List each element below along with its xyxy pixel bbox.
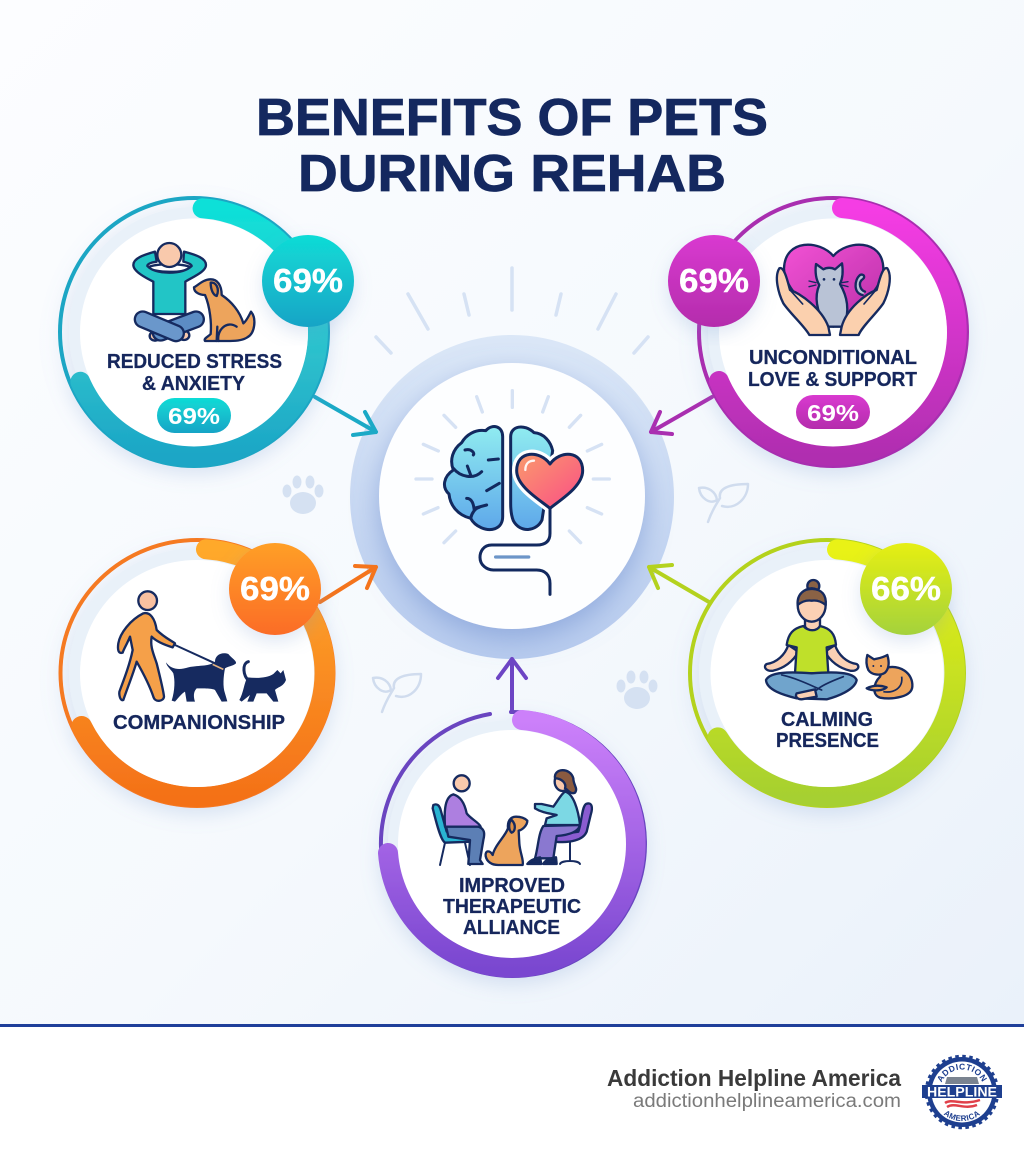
label: LOVE & SUPPORT — [748, 369, 917, 391]
icon: woman meditating with cat — [765, 580, 912, 699]
icon: person walking dog and cat — [118, 591, 286, 702]
title: BENEFITS OF PETS — [256, 89, 768, 147]
title — [256, 89, 768, 203]
label: CALMING — [781, 709, 873, 731]
arrow: stress to hub — [315, 397, 376, 435]
badge: 69% companionship: 69% — [240, 570, 310, 607]
footer brand name: Addiction Helpline America — [607, 1065, 901, 1091]
icon: leaf right — [699, 484, 748, 522]
badge: 69% stress — [262, 235, 354, 327]
logo seal: HELPLINE — [927, 1084, 997, 1100]
label: COMPANIONSHIP — [113, 712, 285, 734]
icon: brain and heart — [416, 391, 609, 594]
badge: 69% companionship — [229, 543, 321, 635]
label: & ANXIETY — [142, 373, 246, 395]
badge: 69% love: 69% — [679, 262, 749, 299]
label: IMPROVED — [459, 875, 565, 897]
badge: 66% calming: 66% — [871, 570, 941, 607]
footer url: addictionhelplineamerica.com — [633, 1091, 901, 1112]
panel: companionship — [60, 540, 334, 806]
arrow: love to hub — [651, 397, 712, 434]
panel: unconditional love and support — [699, 198, 967, 466]
footer — [0, 1024, 1024, 1130]
stat pill: 69% — [807, 400, 859, 426]
label: THERAPEUTIC — [443, 896, 581, 918]
icon: leaf left — [373, 674, 421, 712]
label: UNCONDITIONAL — [749, 347, 917, 369]
logo seal: ADDICTION — [938, 1064, 987, 1082]
stat pill: 69% — [168, 403, 220, 429]
logo seal — [922, 1054, 1002, 1130]
label — [443, 875, 581, 939]
icon: paw right — [616, 670, 658, 709]
stat pill — [796, 395, 870, 429]
label — [776, 709, 879, 752]
label: REDUCED STRESS — [107, 351, 282, 373]
label: ALLIANCE — [463, 917, 560, 939]
badge: 66% calming — [860, 543, 952, 635]
badge: 69% love — [668, 235, 760, 327]
icon: hands holding heart and cat — [777, 245, 890, 335]
title: DURING REHAB — [298, 145, 726, 203]
outer rays — [376, 268, 648, 353]
panel: calming presence — [690, 540, 964, 806]
label — [748, 347, 917, 391]
arrow: calming to hub — [649, 565, 709, 602]
label: PRESENCE — [776, 730, 879, 752]
arrow: companionship to hub — [320, 566, 376, 602]
central hub — [350, 335, 674, 659]
badge: 69% stress: 69% — [273, 262, 343, 299]
logo seal: AMERICA — [944, 1111, 980, 1122]
panel: improved therapeutic alliance — [381, 712, 645, 976]
icon: relaxed person with dog — [133, 243, 254, 341]
arrow: alliance to hub — [498, 659, 526, 712]
label — [107, 351, 282, 395]
icon: paw left — [282, 476, 324, 514]
stat pill — [157, 398, 231, 433]
icon: therapy session with dog — [433, 770, 592, 865]
panel: reduced stress and anxiety — [60, 198, 328, 466]
